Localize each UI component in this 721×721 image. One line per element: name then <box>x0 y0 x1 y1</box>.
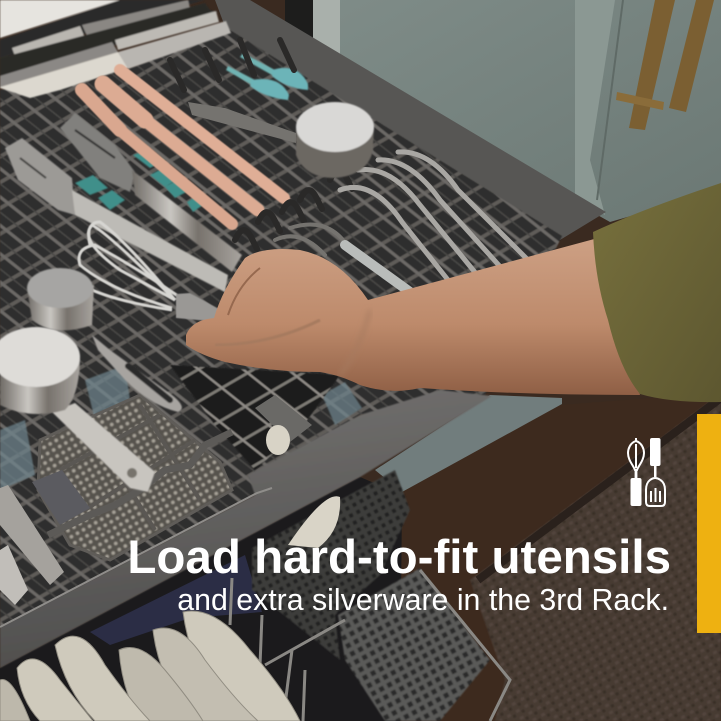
teal spoons <box>226 53 308 100</box>
text: subheading: and extra silverware in the 3rd Rack. <box>177 584 669 617</box>
arm and hand <box>186 238 640 395</box>
dishwasher third rack <box>0 0 606 627</box>
rack tines and spoons <box>170 40 530 292</box>
oval handle <box>92 335 182 412</box>
silver tongs <box>5 113 242 292</box>
whisk <box>79 222 228 322</box>
lower rack with plates and basket <box>0 470 510 721</box>
yellow accent bar <box>697 414 721 633</box>
rack front rail <box>0 390 492 668</box>
cutlery clip icon <box>32 470 90 525</box>
dark cavity squares <box>170 365 340 470</box>
icon: whisk and spatula <box>628 438 665 506</box>
tine clip <box>255 395 312 442</box>
text: headline: Load hard-to-fit utensils <box>127 531 671 584</box>
plates <box>0 611 300 721</box>
teal lower rack glimpses <box>75 150 203 212</box>
silverware basket <box>252 470 410 660</box>
measuring cup: left middle <box>27 268 94 330</box>
left edge tabs <box>0 485 64 585</box>
butter knife <box>188 102 296 143</box>
perforated plate <box>38 395 232 560</box>
measuring cup: top right <box>296 102 374 178</box>
knives <box>0 0 231 98</box>
measuring cup: bottom left with handle <box>0 327 155 492</box>
blue-grey panels below rack <box>0 365 362 490</box>
wavy tine edge <box>48 432 232 535</box>
pink utensils <box>82 70 284 224</box>
olive sleeve <box>593 183 721 402</box>
